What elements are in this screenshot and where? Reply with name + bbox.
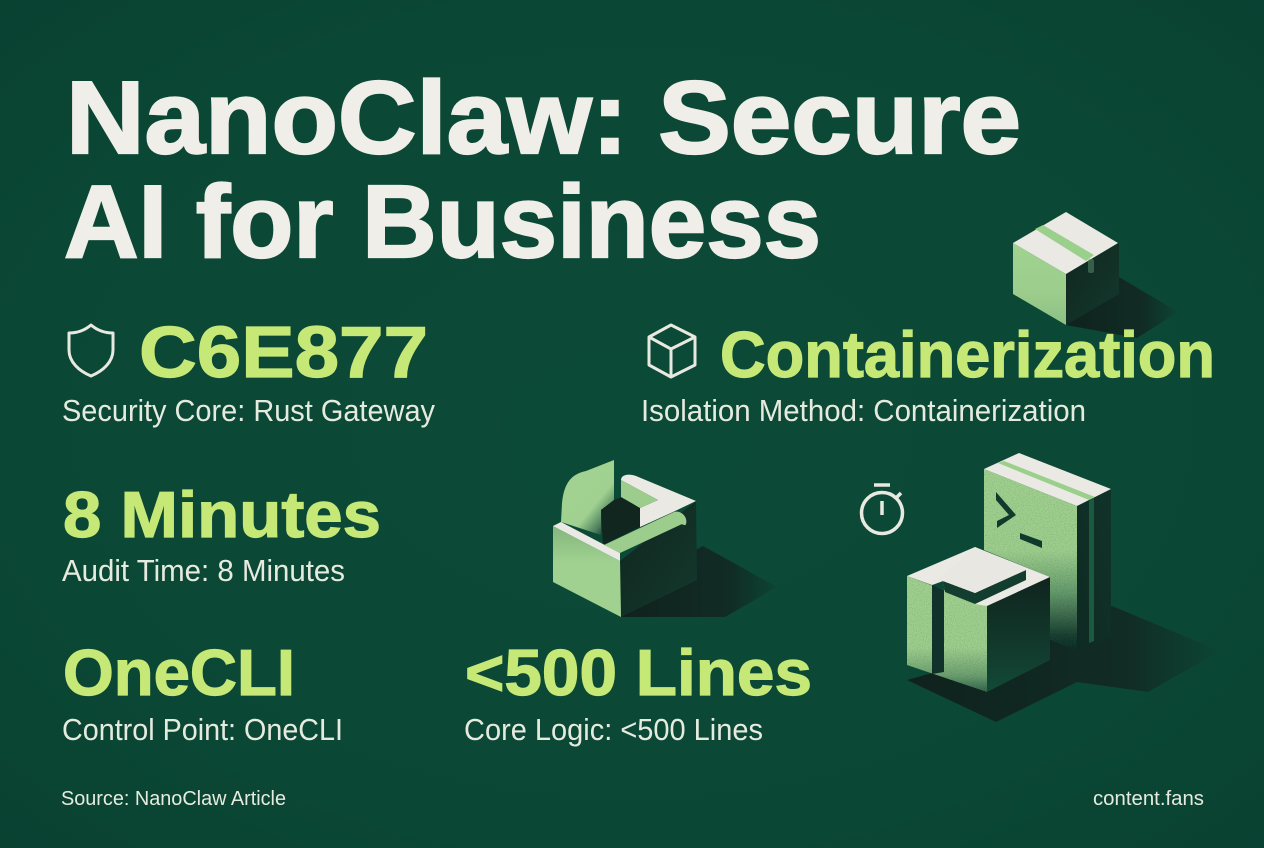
- illustration: open box: [553, 460, 777, 617]
- metric: audit time: Audit Time: 8 Minutes: [62, 553, 345, 588]
- metric: core logic: [464, 636, 812, 747]
- brand credit: content.fans: [1093, 788, 1204, 810]
- metric: control point: Control Point: OneCLI: [62, 712, 343, 747]
- metric: control point: [62, 636, 343, 747]
- metric: control point: OneCLI: [63, 636, 295, 709]
- metric: audit time: [62, 478, 381, 588]
- illustration: shipping box: [1013, 212, 1178, 338]
- metric: isolation method: Containerization: [720, 318, 1215, 391]
- metric: isolation method: [641, 318, 1215, 428]
- metric: security core: C6E877: [139, 313, 428, 393]
- tall terminal block: [984, 453, 1111, 651]
- title: [64, 60, 1021, 279]
- title: AI for Business: [64, 164, 821, 279]
- metric: security core: [62, 313, 435, 428]
- illustration: terminal blocks: [907, 453, 1220, 722]
- icon: cube: [649, 325, 695, 377]
- metric: core logic: Core Logic: <500 Lines: [464, 712, 763, 747]
- metric: isolation method: Isolation Method: Containerization: [641, 393, 1086, 428]
- metric: audit time: 8 Minutes: [63, 478, 381, 551]
- metric: security core: Security Core: Rust Gateway: [62, 393, 435, 428]
- source note: Source: NanoClaw Article: [61, 788, 286, 810]
- icon: stopwatch: [862, 485, 902, 534]
- front cube: [907, 547, 1050, 692]
- icon: shield: [69, 325, 113, 376]
- metric: core logic: <500 Lines: [465, 636, 812, 709]
- title: NanoClaw: Secure: [66, 60, 1021, 175]
